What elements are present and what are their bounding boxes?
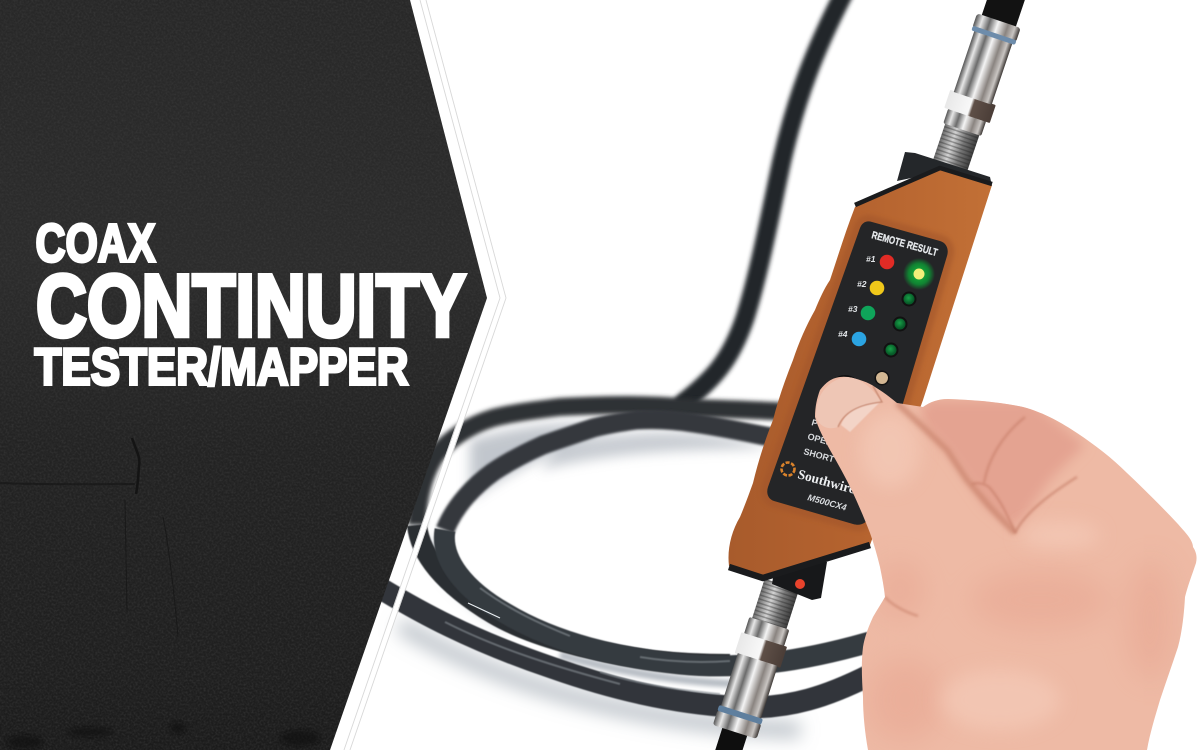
test button — [828, 375, 862, 409]
connector black cable — [981, 0, 1030, 29]
top black cap — [897, 152, 992, 186]
port labels: #2 — [857, 279, 867, 289]
skin tone patches — [876, 576, 1167, 730]
dark chevron panel — [0, 0, 487, 750]
title line: CONTINUITY: CONTINUITY — [36, 256, 466, 355]
connector black cable — [707, 727, 747, 750]
port labels: #1 — [866, 254, 876, 264]
mode labels: P — [810, 417, 819, 429]
body black trim — [729, 168, 992, 578]
connector hex nut — [944, 90, 996, 123]
tester device — [728, 152, 992, 600]
bottom coax connector — [697, 577, 805, 750]
remote indicator LEDs — [852, 255, 894, 346]
title — [34, 214, 466, 396]
cable gap glint — [468, 603, 500, 618]
coiled coax cable — [380, 405, 870, 707]
port labels: #3 — [848, 304, 858, 314]
title line: TESTER/MAPPER: TESTER/MAPPER — [34, 338, 408, 396]
bottom black cap — [772, 560, 827, 600]
cable loop: left middle strand — [417, 525, 730, 664]
blurred background cable — [684, 0, 843, 402]
Southwire logo mark — [782, 462, 794, 476]
Southwire wordmark: Southwire — [796, 466, 857, 497]
connector threads — [930, 122, 980, 179]
thumb shadow edge — [897, 403, 1015, 533]
connector threads — [752, 579, 799, 630]
thumbnail — [816, 377, 882, 428]
lit green LED — [903, 258, 935, 290]
connector flange and blue ring — [971, 13, 1021, 45]
connector hex nut — [735, 632, 787, 668]
connector flange and blue ring — [713, 705, 763, 739]
orange body — [728, 169, 992, 575]
black control panel — [767, 221, 948, 525]
cable loop: upper second strand — [445, 420, 790, 530]
finger crease — [1015, 477, 1077, 533]
hand — [800, 370, 1200, 750]
cable shadows — [400, 423, 800, 730]
nail cuticle line — [838, 386, 882, 427]
mode labels — [802, 417, 836, 464]
thumbnail lunula — [841, 402, 880, 432]
connector collar — [943, 108, 986, 136]
wrist fold — [885, 597, 918, 616]
chevron white outline lines — [344, 0, 506, 750]
title line: COAX: COAX — [36, 214, 156, 274]
connector sleeve — [721, 653, 778, 719]
top coax connector — [925, 0, 1035, 181]
model number: M500CX4 — [806, 492, 848, 513]
port labels — [838, 254, 876, 339]
cable sheen — [445, 588, 730, 694]
knuckle fold — [972, 417, 1025, 533]
cable loop: inner strand — [444, 530, 870, 666]
hand silhouette — [800, 370, 1200, 750]
curled fingers tone — [920, 400, 1085, 530]
status LEDs — [874, 292, 916, 386]
cable loop: upper back strand — [417, 405, 790, 525]
heading: remote result: REMOTE RESULT — [870, 229, 939, 259]
connector collar — [744, 617, 789, 647]
mode labels: OPEN — [806, 431, 834, 448]
connector sleeve — [954, 29, 1013, 105]
cable loop: outer lower strand — [380, 588, 870, 707]
port labels: #4 — [838, 329, 848, 339]
mode labels: SHORT — [802, 446, 836, 464]
light skin highlights — [860, 412, 1100, 730]
panel recess — [767, 221, 948, 525]
